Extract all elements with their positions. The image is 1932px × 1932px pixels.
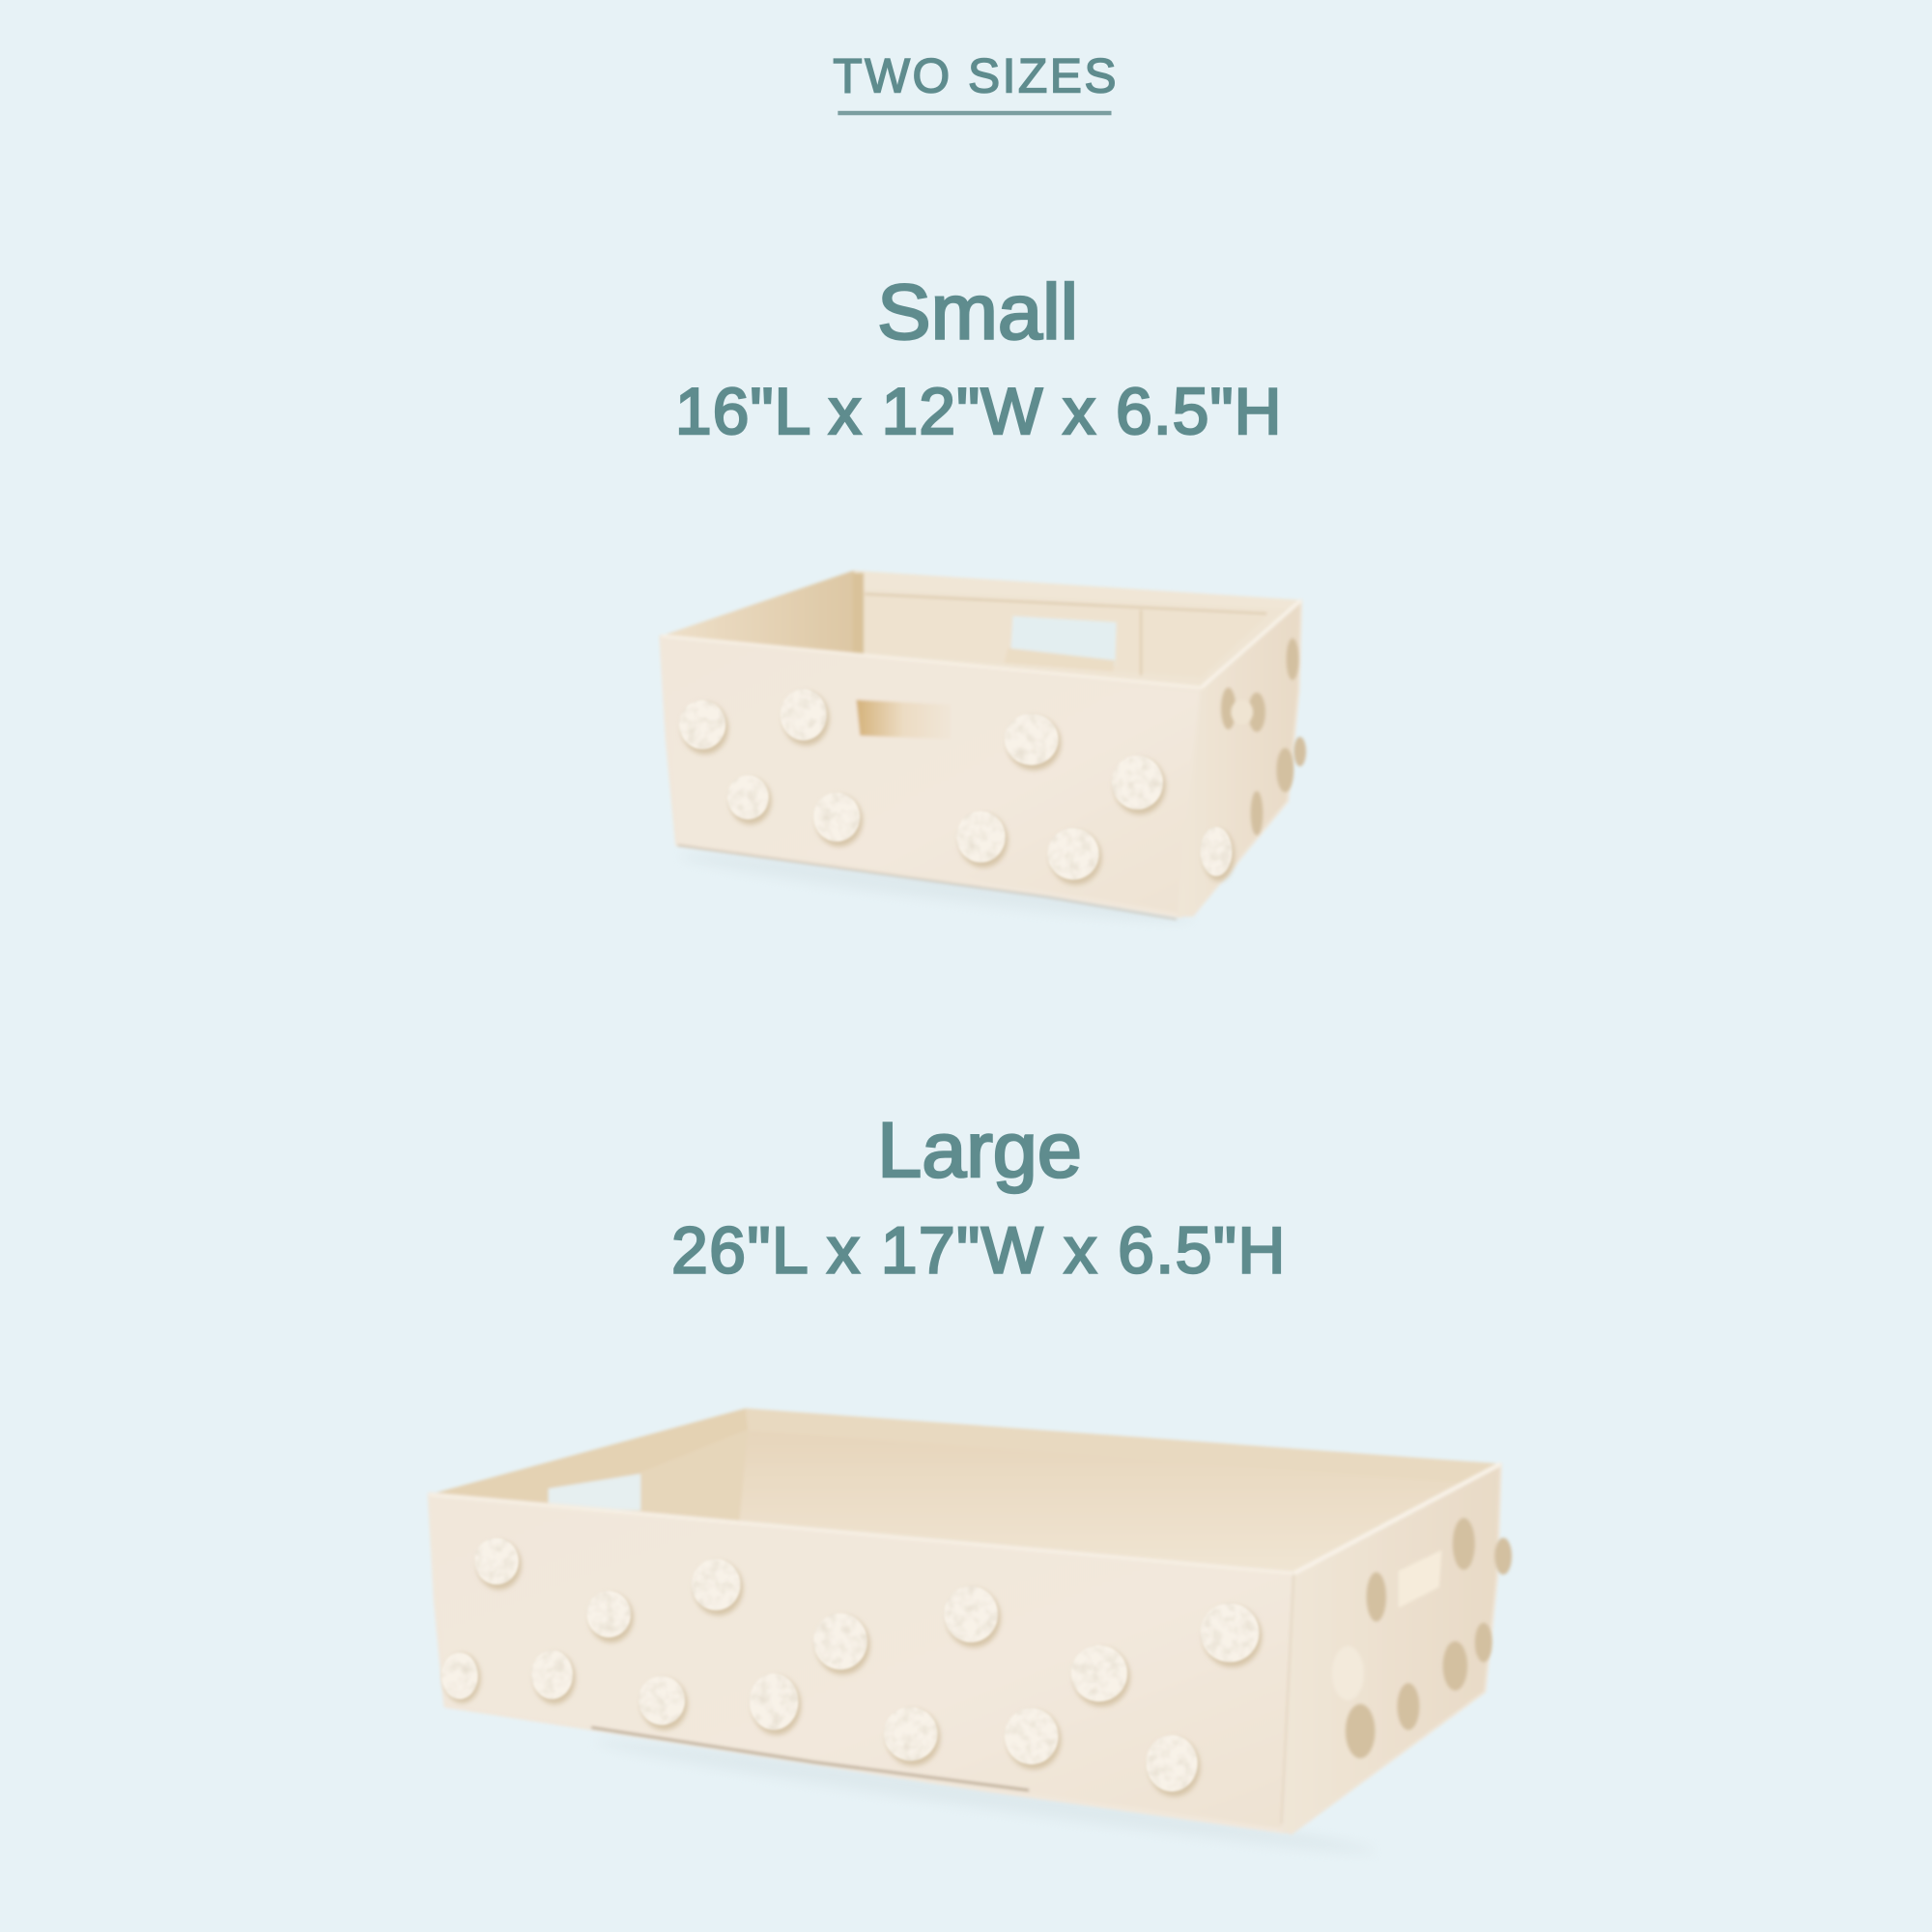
front face [430, 1494, 1293, 1831]
front handle hole [856, 699, 952, 739]
back wall interior [739, 1408, 1501, 1574]
back handle hole [1010, 616, 1117, 666]
pom-poms: large basket [441, 1518, 1512, 1797]
heading: large: Large [877, 1107, 1082, 1194]
right face [1178, 600, 1301, 916]
bottom edge [678, 845, 1177, 920]
left wall interior [429, 1408, 748, 1513]
right face [1284, 1463, 1501, 1833]
bottom shadow line [591, 1727, 1029, 1790]
title: two sizes: TWO SIZES [833, 49, 1117, 103]
back handle hole [549, 1474, 640, 1511]
pom-poms: small basket [679, 639, 1306, 885]
product photo: small basket [662, 571, 1306, 931]
heading: small: Small [877, 270, 1078, 356]
dimensions: large: 26"L x 17"W x 6.5"H [671, 1215, 1285, 1288]
left wall interior [662, 571, 863, 656]
right handle [1399, 1550, 1441, 1608]
front face [662, 637, 1202, 916]
product photo: large basket [429, 1408, 1512, 1863]
dimensions: small: 16"L x 12"W x 6.5"H [675, 376, 1282, 448]
back wall interior [854, 571, 1301, 690]
